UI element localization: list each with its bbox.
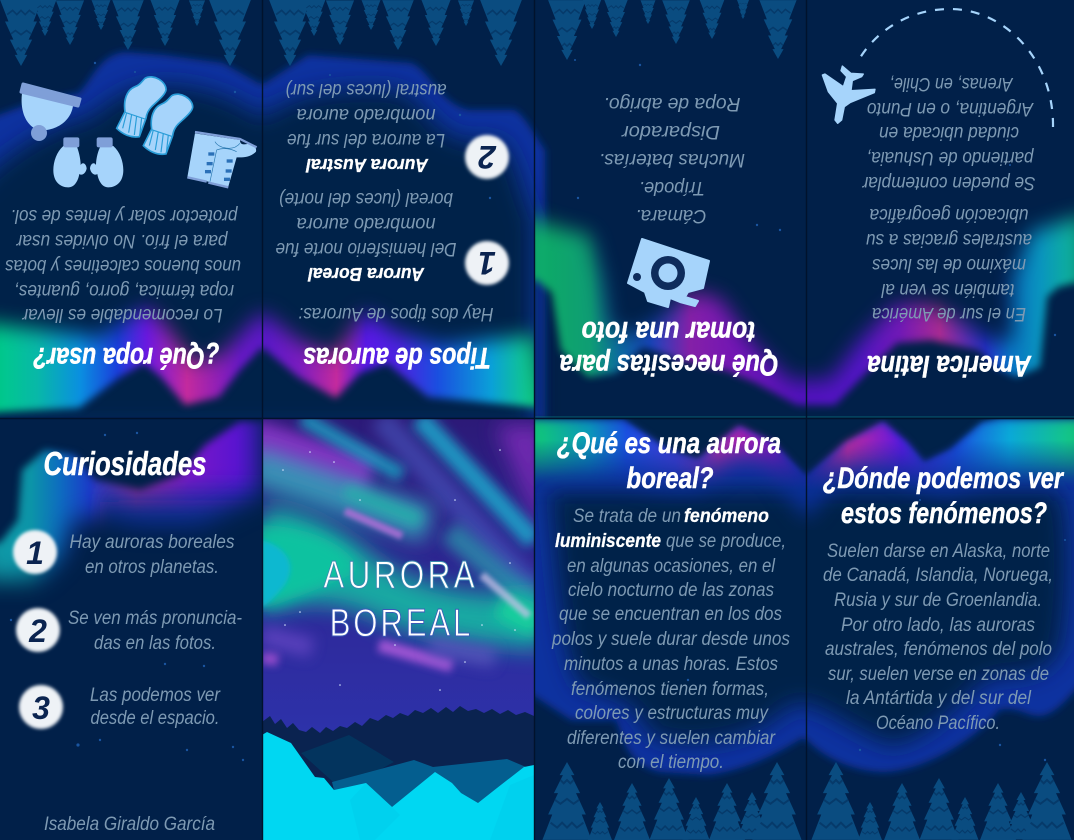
number badge 1: 1	[26, 535, 44, 571]
heading: Qué necesitas para	[560, 348, 778, 381]
text block: australes gracias a su	[866, 229, 1032, 251]
panel: Dónde podemos ver estos fenómenos	[823, 462, 1065, 734]
checklist text	[599, 93, 745, 227]
aurora austral item: nombrado aurora	[296, 104, 436, 126]
text block: cielo nocturno de las zonas	[568, 579, 774, 601]
trees: top left panels	[0, 0, 522, 66]
text block: con el tiempo.	[618, 751, 724, 773]
panel: Qué necesitas para tomar una foto	[560, 93, 778, 381]
aurora boreal item: boreal (luces del norte)	[279, 188, 453, 210]
text block: Argentina, o en Punto	[867, 98, 1034, 120]
author: Isabela Giraldo García	[44, 813, 215, 835]
aurora boreal item: Del hemisferio norte fue	[275, 238, 456, 260]
text block: Por otro lado, las auroras	[841, 614, 1035, 636]
aurora: lower left panel	[0, 419, 262, 596]
text block: que se encuentran en los dos	[559, 603, 782, 625]
checklist text: Muchas baterías.	[599, 149, 745, 171]
number badge 3	[19, 685, 63, 729]
heading: America latina	[867, 349, 1032, 382]
heading	[557, 427, 781, 495]
fact 1	[70, 531, 235, 578]
text block: Océano Pacífico.	[876, 712, 1000, 734]
aurora austral item: Aurora Austral	[305, 155, 429, 175]
text block: Se pueden contemplar	[861, 172, 1036, 194]
heading: Curiosidades	[44, 445, 206, 482]
checklist text: Disparador	[620, 121, 720, 143]
dashed flight path	[857, 9, 1053, 127]
heading: ¿Qué es una aurora	[557, 427, 781, 460]
text block: luminiscente	[555, 530, 661, 552]
cover title	[323, 560, 475, 637]
heading	[560, 315, 778, 381]
aurora austral item: La aurora del sur fue	[287, 129, 445, 151]
icon: camera	[628, 239, 709, 307]
text block: que se produce,	[666, 530, 786, 552]
cover landscape	[262, 706, 534, 840]
text block: fenómenos tienen formas,	[571, 678, 769, 700]
text block	[861, 73, 1036, 325]
number badge 1: 1	[478, 245, 496, 281]
text block	[551, 505, 790, 773]
text block	[5, 205, 241, 326]
text block: Rusia y sur de Groenlandia.	[834, 589, 1042, 611]
aurora: top right panels	[535, 204, 1074, 418]
number badge 2: 2	[478, 139, 497, 175]
aurora boreal item: nombrado aurora	[296, 213, 436, 235]
text block: Lo recomendable es llevar	[21, 304, 222, 326]
fact 3: desde el espacio.	[90, 707, 220, 729]
checklist text: Trípode.	[639, 177, 705, 199]
aurora: top left panels	[0, 52, 545, 430]
number badge 2	[16, 608, 60, 652]
fact 1: Hay auroras boreales	[70, 531, 235, 553]
heading	[823, 462, 1065, 530]
text block: polos y suele durar desde unos	[551, 628, 790, 650]
text block: máximo de las luces	[872, 254, 1026, 276]
text block: partiendo de Ushuaia,	[866, 147, 1034, 169]
panel: Qué ropa usar	[5, 77, 257, 374]
text block: también se ven al	[881, 279, 1014, 301]
text block: la Antártida y del sur del	[846, 687, 1032, 709]
fact 1: en otros planetas.	[85, 556, 219, 578]
fact 2: das en las fotos.	[94, 632, 216, 654]
number badge 1	[465, 241, 509, 285]
text block: minutos a unas horas. Estos	[564, 653, 778, 675]
fact 2	[68, 607, 242, 654]
text block: Arenas, en Chile,	[890, 73, 1013, 95]
heading: boreal?	[626, 462, 714, 495]
fact 3	[90, 684, 221, 729]
icon: boots	[187, 132, 257, 187]
number badge 2: 2	[28, 613, 47, 649]
text block: en algunas ocasiones, en el	[567, 555, 776, 577]
icon: hat	[21, 84, 80, 141]
text block: ciudad ubicada en	[879, 122, 1019, 144]
panel: Tipos de auroras	[275, 79, 509, 374]
icon: mittens	[53, 137, 123, 187]
number badge 3: 3	[32, 690, 50, 726]
fact 2: Se ven más pronuncia-	[68, 607, 242, 629]
text block: fenómeno	[684, 505, 769, 527]
cover title: AURORA	[323, 554, 475, 597]
aurora austral item: austral (luces del sur)	[286, 79, 446, 101]
panel: Curiosidades	[13, 445, 242, 835]
checklist text: Ropa de abrigo.	[604, 93, 740, 115]
text block	[823, 540, 1053, 734]
number badge 2	[465, 135, 509, 179]
trees: top third panel	[548, 0, 797, 60]
fact 3: Las podemos ver	[90, 684, 221, 706]
number badge 1	[13, 530, 57, 574]
trees: bottom right panels	[542, 762, 1072, 840]
text block: ubicación geográfica	[869, 204, 1028, 226]
text block: Se trata de un	[573, 505, 681, 527]
aurora austral item	[286, 79, 446, 175]
text block: diferentes y suelen cambiar	[567, 727, 776, 749]
aurora: lower right panels	[520, 400, 1074, 775]
cover title: BOREAL	[330, 602, 470, 645]
heading: tomar una foto	[582, 315, 756, 348]
aurora boreal item	[275, 188, 456, 284]
checklist text: Cámara.	[636, 205, 706, 227]
panel: cover	[250, 418, 545, 840]
aurora boreal item: Aurora Boreal	[307, 264, 425, 284]
text block: En el sur de América	[872, 303, 1026, 325]
intro text: Hay dos tipos de Auroras:	[298, 303, 494, 325]
icon: socks	[117, 77, 193, 154]
icon: plane	[822, 66, 875, 123]
heading: Tipos de auroras	[303, 341, 491, 374]
text block: colores y estructuras muy	[575, 702, 769, 724]
panel: Qué es una aurora boreal	[551, 427, 790, 773]
panel: America latina	[822, 9, 1053, 382]
